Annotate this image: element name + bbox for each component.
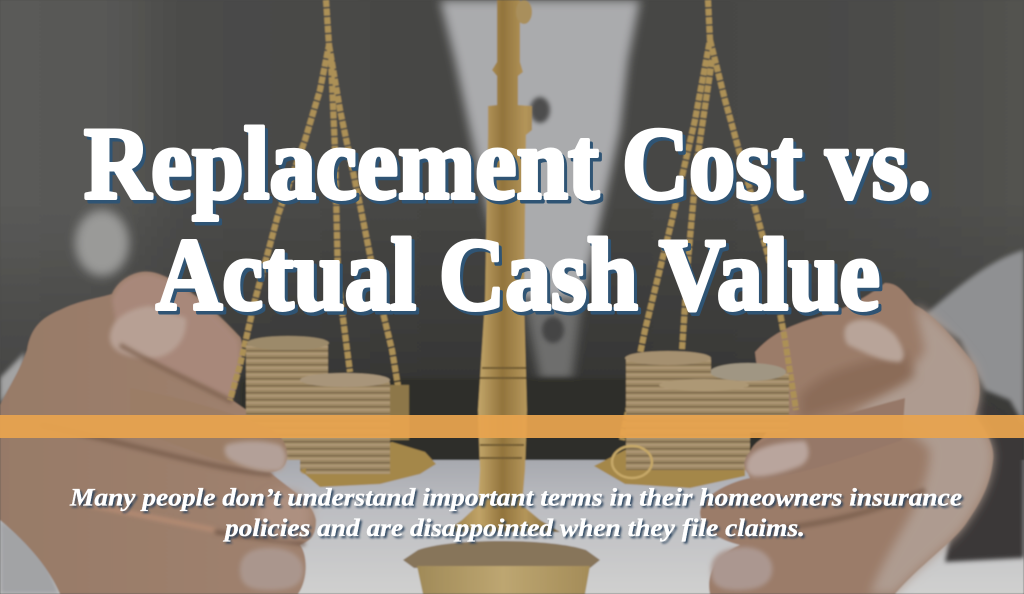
left coin stacks [246, 336, 409, 474]
title [84, 107, 934, 336]
thumbnail [110, 306, 186, 358]
title text: Actual Cash Value [156, 218, 880, 332]
right sleeve cuff [925, 250, 1024, 425]
lower fingernail [711, 547, 772, 590]
right chains [622, 0, 796, 440]
finger crease [120, 345, 232, 402]
right upper fingernail [746, 441, 809, 477]
middle fingertip highlight [259, 491, 311, 539]
scale base lid [403, 541, 600, 568]
subtitle shadow [71, 484, 964, 544]
title text [84, 107, 931, 332]
thumbnail [844, 320, 904, 362]
table [0, 460, 1024, 594]
shirt buttons [530, 97, 550, 123]
shirt lower strip [524, 300, 582, 380]
title text: Replacement Cost vs. [84, 107, 931, 221]
title shadow [87, 110, 934, 336]
subtitle text [69, 482, 962, 542]
title shadow: Replacement Cost vs. [87, 110, 934, 224]
subtitle [69, 482, 964, 544]
pale back of hand [850, 305, 993, 594]
dark right sleeve [945, 395, 1024, 562]
right coin stacks [625, 351, 789, 470]
central scale column [403, 0, 600, 594]
lower fingernail [240, 548, 303, 590]
finial knob [516, 0, 532, 24]
finger creases [745, 490, 925, 530]
dark shading toward the lower jacket [0, 200, 1024, 460]
scale base body [417, 566, 590, 594]
left shirt cuff [0, 352, 25, 405]
orange banner stripe [0, 415, 1024, 438]
left hand [0, 272, 316, 594]
right finger over the coins [744, 398, 905, 478]
subtitle text: Many people don’t understand important terms in their homeowners insurance [69, 482, 962, 512]
thumb shading [112, 274, 239, 398]
subtitle text: policies and are disappointed when they file claims. [223, 513, 805, 542]
left finger over the coins [130, 388, 287, 472]
right hand [700, 283, 993, 594]
dark band behind the scale [240, 378, 800, 462]
white shirt [440, 0, 640, 300]
title shadow: Actual Cash Value [159, 222, 883, 336]
left shadow at table [0, 520, 60, 594]
thumb [800, 350, 915, 420]
subtitle shadow: Many people don’t understand important terms in their homeowners insurance [71, 484, 964, 514]
left pan [300, 442, 436, 487]
subtitle shadow: policies and are disappointed when they file claims. [225, 515, 807, 544]
left upper fingernail [225, 441, 286, 471]
pocket square highlight [75, 210, 129, 276]
right pan [594, 450, 745, 488]
left chains [230, 0, 402, 410]
